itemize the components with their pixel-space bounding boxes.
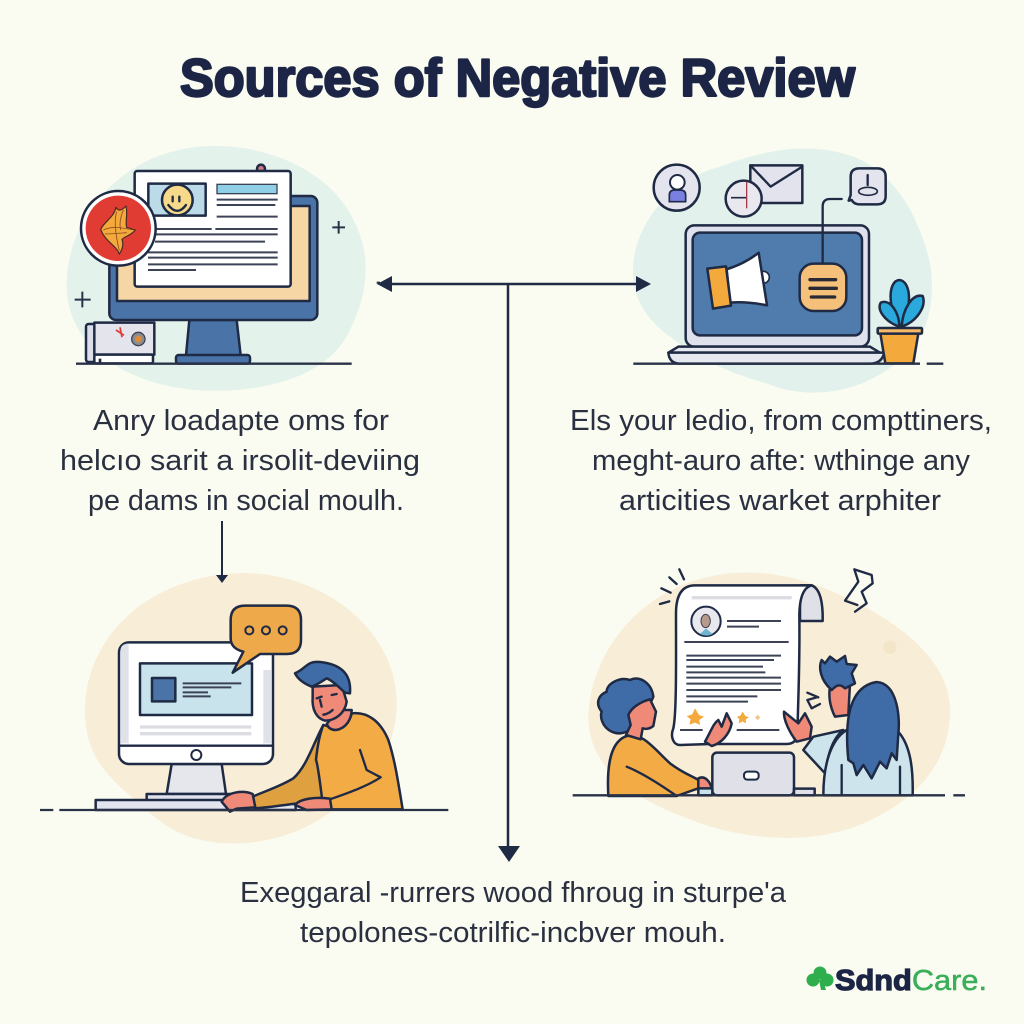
title: Sources of Negative Review <box>180 49 856 108</box>
scroll review document <box>672 585 823 745</box>
review document <box>135 165 291 287</box>
icon: shamrock <box>806 966 834 990</box>
logo <box>806 965 987 997</box>
panel: people discussing review illustration <box>573 569 965 838</box>
desktop computer <box>96 642 296 810</box>
text block: right column: articities warket arphiter <box>619 485 941 517</box>
small device box <box>86 323 154 363</box>
background blob: sand <box>588 572 950 838</box>
chat bubble icon <box>849 168 886 204</box>
connector arrows <box>216 276 651 862</box>
user icon <box>654 165 700 211</box>
background blob: mint <box>633 149 932 393</box>
laptop on table <box>698 753 815 795</box>
text block: left column: Anry loadapte oms for <box>93 405 389 437</box>
text block: right column: meght-auro afte: wthinge any <box>592 445 970 477</box>
potted plant <box>878 280 924 363</box>
text block: bottom: Exeggaral -rurrers wood fhroug in sturpe'a <box>240 877 787 909</box>
emphasis marks and squiggle <box>660 569 897 708</box>
megaphone <box>707 253 769 309</box>
background blob: sand <box>85 573 397 843</box>
red flame badge <box>81 191 156 266</box>
text block: bottom: tepolones-cotrilfic-incbver mouh. <box>300 917 726 949</box>
two people facing away <box>784 656 913 795</box>
speech bubble <box>231 606 301 673</box>
background blob: mint <box>67 146 366 391</box>
text block: right column <box>570 405 992 517</box>
person with curly hair <box>598 679 732 796</box>
text block: left column <box>60 405 420 517</box>
text block: bottom <box>240 877 787 949</box>
connector from bubble to tile <box>823 199 842 265</box>
laptop <box>668 225 884 364</box>
person in orange sweater <box>222 662 403 812</box>
panel: website review illustration <box>67 146 380 391</box>
sparkle marks <box>75 221 380 307</box>
orange message tile <box>800 264 846 311</box>
envelope and clock icons <box>726 165 802 217</box>
text block: right column: Els your ledio, from compttiners, <box>570 405 992 437</box>
panel: laptop campaign illustration <box>633 149 943 393</box>
panel: person at computer illustration <box>40 573 448 843</box>
monitor <box>109 196 317 364</box>
text block: left column: helcıo sarit a irsolit-deviing <box>60 445 420 477</box>
logo wordmark: SdndCare. <box>835 965 987 997</box>
text block: left column: pe dams in social moulh. <box>88 485 404 517</box>
